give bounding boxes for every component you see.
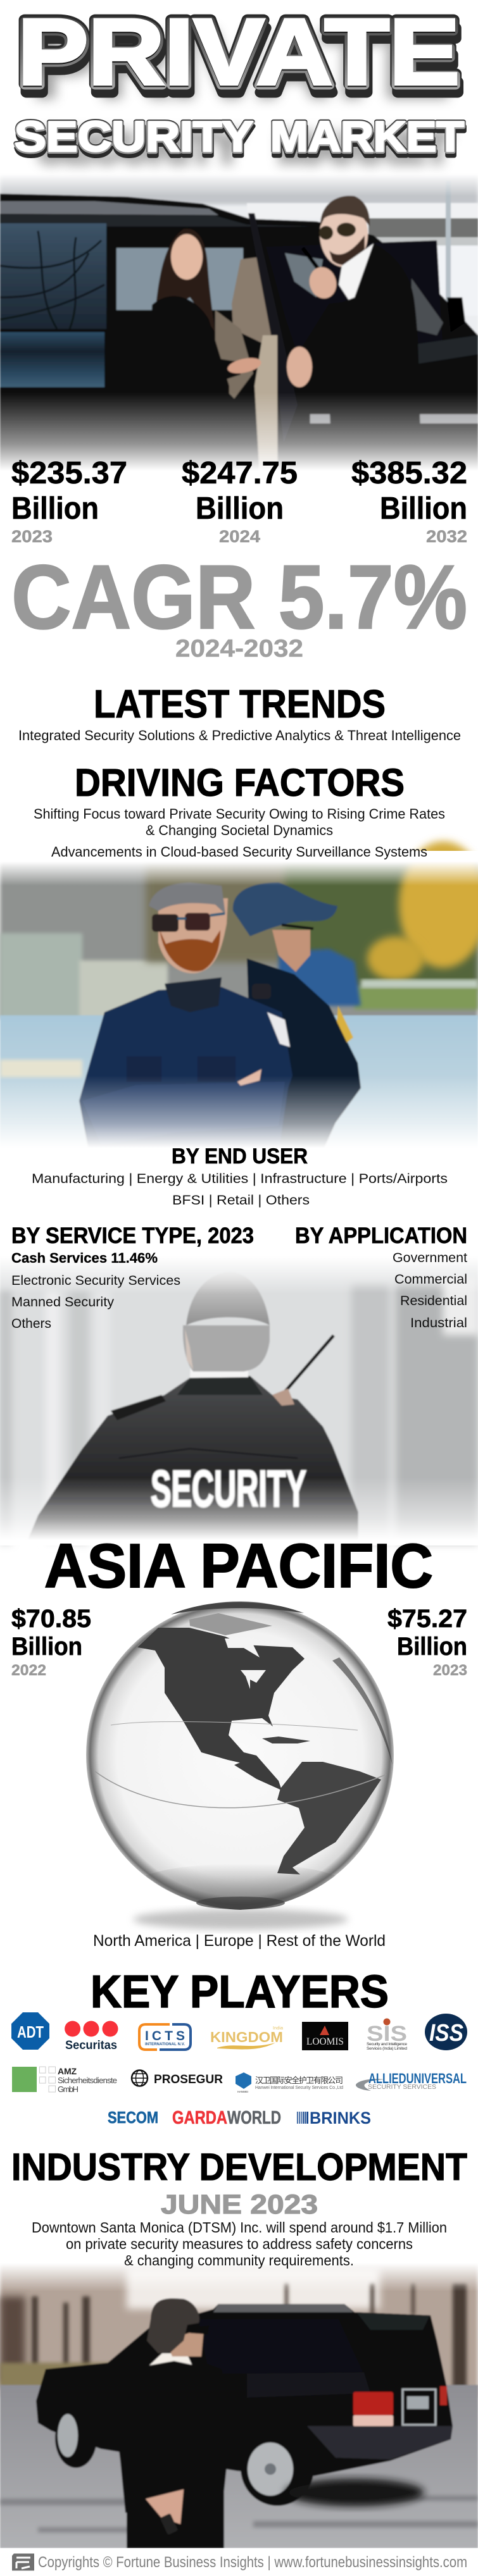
- segment: by application: BY APPLICATION: [295, 1223, 467, 1248]
- stat: Asia Pacific 2022: [11, 1605, 91, 1679]
- industry development section: Downtown Santa Monica (DTSM) Inc. will spend around $1.7 Million: [32, 2219, 447, 2236]
- driving factors section: Advancements in Cloud-based Security Surveillance Systems: [51, 844, 427, 860]
- logo: Hanwei: HANWEI: [237, 2090, 248, 2093]
- stat: 2023: $235.37: [11, 456, 127, 490]
- icon: glass globe: [86, 1601, 394, 1929]
- logo: Brinks: BRINKS: [310, 2108, 371, 2127]
- regional list: North America | Europe | Rest of the World: [93, 1932, 386, 1950]
- segment: by end user: BY END USER: [172, 1144, 308, 1168]
- words: SECURITY MARKET: SECURITY: [15, 113, 253, 161]
- woman: [141, 229, 263, 471]
- logo: AMZ: GmbH: [58, 2084, 79, 2094]
- segment: by service type: Others: [11, 1316, 51, 1331]
- equator line: [95, 1771, 386, 1808]
- stat: 2024: Billion: [196, 492, 284, 526]
- photo: bodyguards at black car: [0, 163, 478, 478]
- SUV: [36, 2304, 453, 2476]
- stat: Asia Pacific 2022: Billion: [11, 1633, 82, 1661]
- words: SECURITY MARKET: [15, 113, 465, 165]
- man with sunglasses and radio: [287, 195, 423, 471]
- latest trends section: [18, 683, 461, 743]
- stat: 2032: Billion: [380, 492, 467, 526]
- woman guard: [114, 2298, 232, 2548]
- driving factors section: & Changing Societal Dynamics: [146, 822, 333, 838]
- latest trends section: LATEST TRENDS: [94, 683, 386, 726]
- wheels: [55, 2408, 97, 2468]
- words: SECURITY MARKET: MARKET: [270, 113, 464, 161]
- driving factors section: DRIVING FACTORS: [75, 761, 405, 804]
- stat: Asia Pacific 2023: $75.27: [387, 1605, 467, 1633]
- logo: GardaWorld: [172, 2108, 281, 2128]
- logo: ICTS: ICTS: [145, 2029, 185, 2043]
- top fade: [0, 163, 478, 196]
- logo: Kingdom: India: [273, 2026, 283, 2031]
- logo: ISS: [425, 2014, 467, 2050]
- latest trends section: Integrated Security Solutions & Predictive Analytics & Threat Intelligence: [18, 728, 461, 743]
- stat: 2032: [351, 456, 467, 546]
- stat: 2023: Billion: [11, 492, 99, 526]
- segment: by application: Commercial: [394, 1272, 467, 1287]
- logo: Securitas: [65, 2021, 118, 2052]
- top fade: [0, 2251, 478, 2291]
- stat: 2023: [11, 456, 127, 546]
- word: PRIVATE: PRIVATE: [18, 1, 460, 106]
- industry development section: on private security measures to address safety concerns: [66, 2236, 413, 2252]
- stat: Asia Pacific 2023: 2023: [433, 1662, 467, 1679]
- stat: 2032: 2032: [426, 527, 467, 546]
- company logos: [11, 2012, 467, 2128]
- footer: [0, 2548, 478, 2576]
- top fade: [0, 1240, 478, 1294]
- title shadow: PRIVATE: [32, 12, 450, 116]
- door trim beige: [255, 335, 277, 471]
- logo: SIS: SIS: [367, 2022, 407, 2046]
- segment: by service type: BY SERVICE TYPE, 2023: [11, 1223, 254, 1248]
- industry development section: [11, 2146, 467, 2269]
- logo: Hanwei: 汉卫国际安全护卫有限公司: [255, 2076, 343, 2085]
- top fade: [0, 851, 478, 886]
- logo: Kingdom: KINGDOM: [210, 2029, 283, 2045]
- logo: ICTS: INTERNATIONAL N.V.: [145, 2043, 185, 2047]
- segment: by application: [295, 1223, 467, 1330]
- title shadow: MARKET: [279, 123, 450, 171]
- logo: Kingdom: [210, 2026, 283, 2049]
- logo: Hanwei: [236, 2072, 343, 2093]
- logo: ADT: ADT: [17, 2022, 44, 2041]
- words: SECURITY MARKET: MARKET: [270, 113, 464, 161]
- segment: by application: Government: [393, 1250, 467, 1265]
- heading: Asia Pacific: ASIA PACIFIC: [44, 1531, 433, 1601]
- title shadow: SECURITY: [38, 123, 241, 171]
- driving factors section: Shifting Focus toward Private Security Owing to Rising Crime Rates: [34, 806, 445, 822]
- logo: Hanwei: Hanwei International Security Services Co.,Ltd: [255, 2086, 343, 2090]
- segment: by service type: Cash Services 11.46%: [11, 1250, 158, 1266]
- segment: by end user: BFSI | Retail | Others: [172, 1192, 310, 1208]
- segment: by service type: Electronic Security Services: [11, 1273, 180, 1288]
- logo: Prosegur: PROSEGUR: [154, 2073, 223, 2086]
- stat: 2023: 2023: [11, 527, 53, 546]
- words: SECURITY MARKET: SECURITY: [15, 113, 253, 161]
- North America: [137, 1628, 305, 1768]
- logo: GardaWorld: GARDA: [172, 2108, 227, 2128]
- title: Private Security Market: [15, 0, 465, 171]
- logo: Secom: SECOM: [108, 2108, 158, 2127]
- words: SECURITY MARKET: SECURITY: [15, 117, 254, 165]
- heading: Key Players: KEY PLAYERS: [91, 1967, 389, 2017]
- segment: by service type: [11, 1223, 254, 1331]
- front guard: [79, 882, 292, 1151]
- icon: Fortune Business Insights logo: [12, 2553, 34, 2571]
- industry development section: JUNE 2023: [161, 2189, 318, 2220]
- word: PRIVATE: PRIVATE: [18, 0, 460, 104]
- photo: security officer from behind: [0, 1240, 478, 1545]
- South America: [277, 1762, 381, 1874]
- logo: Prosegur: [132, 2070, 223, 2086]
- words: SECURITY MARKET: MARKET: [270, 113, 464, 161]
- jacket lettering: SECURITY: [151, 1460, 306, 1518]
- logo: AMZ: AMZ: [58, 2066, 77, 2076]
- stat: 2032: $385.32: [351, 456, 467, 490]
- bottom fade: [0, 392, 478, 478]
- segment: by end user: Manufacturing | Energy & Utilities | Infrastructure | Ports/Airports: [32, 1171, 448, 1186]
- segment: by application: Industrial: [410, 1315, 467, 1330]
- word: PRIVATE: PRIVATE: [18, 1, 460, 106]
- industry development section: & changing community requirements.: [124, 2252, 354, 2269]
- open door interior: [113, 232, 272, 405]
- back guard: [233, 882, 361, 1151]
- logo: ADT: [11, 2012, 49, 2050]
- logo: Loomis: LOOMIS: [306, 2036, 344, 2047]
- logo: ISS: ISS: [429, 2020, 463, 2047]
- words: SECURITY MARKET: SECURITY: [15, 113, 253, 161]
- segment: by application: Residential: [400, 1293, 467, 1308]
- stat: 2024: 2024: [219, 527, 260, 546]
- logo: Loomis: [302, 2022, 348, 2050]
- car window with tree reflection: [0, 223, 106, 329]
- words: SECURITY MARKET: MARKET: [271, 117, 465, 165]
- stat: 2024: $247.75: [182, 456, 298, 490]
- driving factors section: [34, 761, 445, 860]
- logo: Allied Universal: SECURITY SERVICES: [368, 2084, 436, 2091]
- head and cap: [183, 1325, 270, 1372]
- logo: ICTS: [139, 2024, 191, 2050]
- stat: Asia Pacific 2022: 2022: [11, 1662, 46, 1679]
- front door frame: [248, 213, 298, 443]
- logo: Allied Universal: [356, 2071, 467, 2091]
- logo: AMZ: Sicherheitsdienste: [58, 2076, 117, 2085]
- CAGR callout: 2024-2032: [175, 635, 303, 662]
- word: PRIVATE: PRIVATE: [18, 0, 460, 104]
- segment: by end user: [32, 1144, 448, 1208]
- stat: 2024: [182, 456, 298, 546]
- logo: SIS: Services (India) Limited: [367, 2047, 407, 2051]
- title shadow: [32, 12, 450, 171]
- car body: [0, 194, 478, 471]
- word: PRIVATE: PRIVATE: [20, 8, 462, 113]
- officer jacket: [26, 1376, 358, 1544]
- segment: by service type: Manned Security: [11, 1294, 114, 1310]
- tail lights: [353, 2392, 393, 2415]
- stat: Asia Pacific 2023: Billion: [397, 1633, 467, 1661]
- bottom fade: [0, 1075, 478, 1155]
- bottom fade: [0, 1477, 478, 1545]
- logo: GardaWorld: WORLD: [227, 2108, 281, 2128]
- logo: SIS: [367, 2018, 407, 2051]
- stat: Asia Pacific 2023: [387, 1605, 467, 1679]
- logo: SIS: Security and Intelligence: [367, 2042, 407, 2047]
- photo: guard watching black SUV: [0, 2251, 478, 2548]
- logo: Securitas: Securitas: [65, 2039, 117, 2052]
- market size statistics: [11, 456, 467, 546]
- photo: two uniformed guards: [0, 841, 478, 1155]
- stat: Asia Pacific 2022: $70.85: [11, 1605, 91, 1633]
- logo: AMZ: [12, 2066, 117, 2094]
